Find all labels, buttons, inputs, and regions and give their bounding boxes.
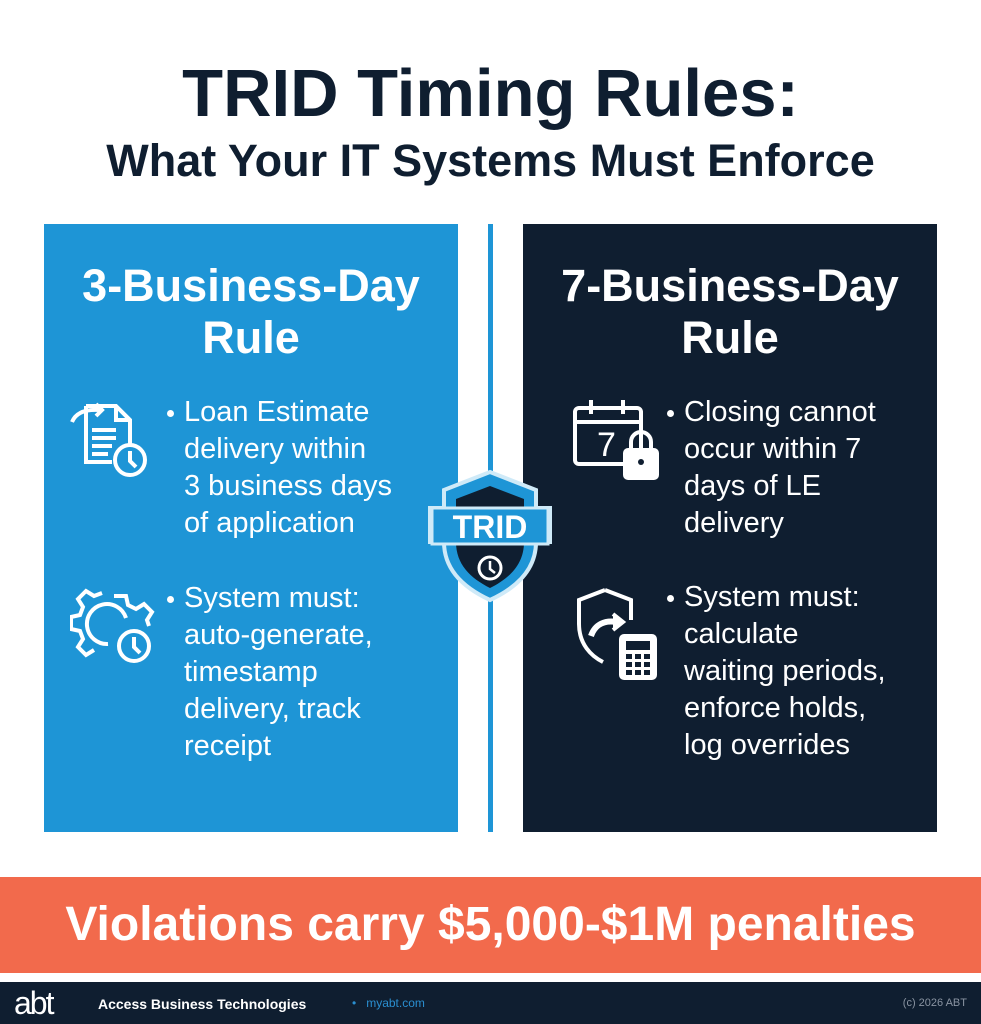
icon: TRID shield badge: TRID [453, 509, 527, 545]
heading: 3-Business-Day Rule [82, 260, 420, 363]
heading: 7-Business-Day Rule: 7-Business-Day [561, 260, 899, 311]
footer [0, 982, 981, 1024]
divider line [488, 224, 493, 832]
bullet: system must calculate: log overrides [684, 729, 850, 761]
bullet: closing cannot occur: Closing cannot [684, 396, 876, 428]
bullet: system must calculate: waiting periods, [684, 655, 886, 687]
bullet: LE delivery [167, 396, 392, 539]
heading: 3-Business-Day Rule: 3-Business-Day [82, 260, 420, 311]
bullet: closing cannot occur: delivery [684, 507, 784, 539]
bullet: system must calculate: calculate [684, 618, 798, 650]
icon: calendar with lock [573, 400, 659, 480]
bullet: closing cannot occur [667, 396, 876, 539]
heading: 7-Business-Day Rule: Rule [681, 312, 779, 363]
bullet: closing cannot occur: occur within 7 [684, 433, 861, 465]
bullet: LE delivery: Loan Estimate [184, 396, 369, 428]
bullet: system must [167, 582, 373, 762]
bullet: system must: System must: [184, 582, 360, 614]
icon: gear with clock [70, 588, 154, 663]
bullet: LE delivery: delivery within [184, 433, 366, 465]
footer company name: Access Business Technologies [98, 996, 306, 1012]
panel: 7-business-day rule [523, 224, 937, 832]
bullet: closing cannot occur: days of LE [684, 470, 821, 502]
bullet: system must: delivery, track [184, 693, 361, 725]
bullet: system must calculate [667, 581, 886, 761]
icon: TRID shield badge [428, 470, 552, 602]
bullet: LE delivery: 3 business days [184, 470, 392, 502]
bullet: system must calculate: System must: [684, 581, 860, 613]
bullet: system must: auto-generate, [184, 619, 373, 651]
panel: 3-business-day rule [44, 224, 458, 832]
title: TRID Timing Rules: [182, 56, 799, 131]
icon: shield with calculator [577, 588, 657, 680]
bullet: system must: receipt [184, 730, 271, 762]
footer copyright: (c) 2026 ABT [903, 997, 967, 1009]
banner: penalties [0, 877, 981, 973]
banner: penalties: Violations carry $5,000-$1M penalties [65, 898, 916, 951]
icon: calendar with lock: 7 [597, 426, 616, 464]
bullet: system must: timestamp [184, 656, 318, 688]
heading: 7-Business-Day Rule [561, 260, 899, 363]
bullet: system must calculate: enforce holds, [684, 692, 866, 724]
bullet: LE delivery: of application [184, 507, 355, 539]
footer url: • myabt.com [352, 996, 425, 1010]
heading: 3-Business-Day Rule: Rule [202, 312, 300, 363]
icon: document with clock [70, 402, 147, 477]
footer logo: abt [14, 985, 52, 1021]
subtitle: What Your IT Systems Must Enforce [106, 135, 875, 186]
